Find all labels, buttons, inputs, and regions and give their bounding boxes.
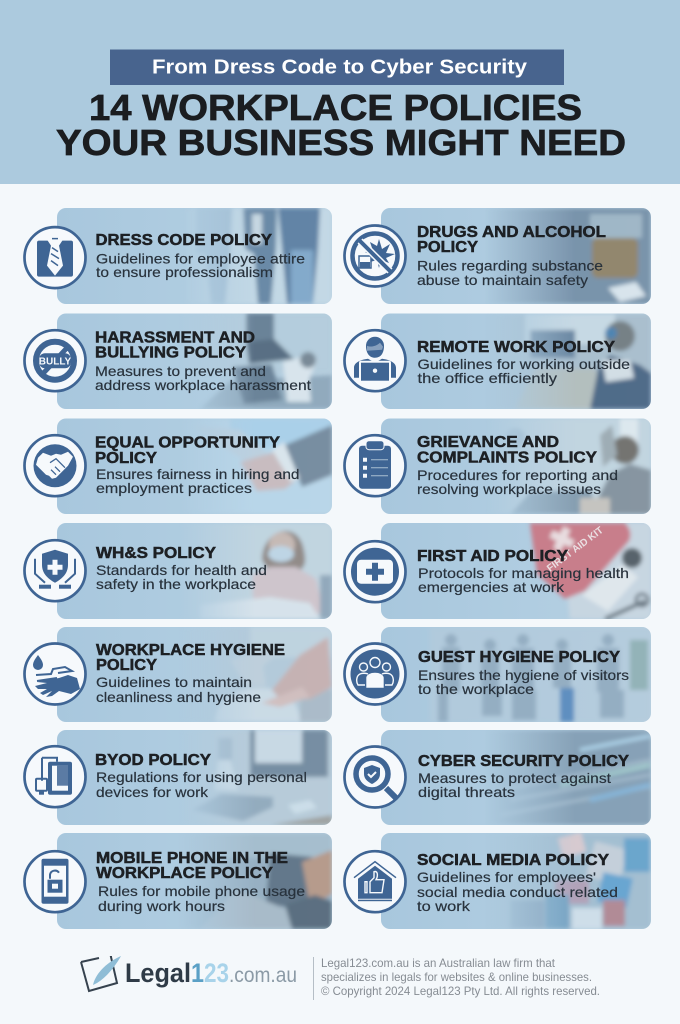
- description: emergencies at work: [418, 579, 565, 595]
- panel: harassment and bullying policy: [24, 313, 332, 409]
- heading: WORKPLACE POLICY: [96, 865, 274, 882]
- photo: man on headset at desk: [516, 314, 651, 409]
- panel: mobile phone policy: [24, 833, 332, 929]
- photo: first aid kit: [530, 523, 651, 619]
- heading: EQUAL OPPORTUNITY: [95, 435, 281, 452]
- description: Procedures for reporting and: [417, 467, 618, 483]
- photo: social media cubes: [510, 833, 651, 929]
- panel: workplace hygiene policy: [24, 627, 332, 722]
- photo: desk with devices: [200, 730, 332, 825]
- description: Measures to prevent and: [95, 363, 266, 379]
- photo: code on screen: [500, 730, 651, 825]
- heading: [417, 224, 606, 256]
- footer text: [321, 957, 600, 998]
- heading: CYBER SECURITY POLICY: [418, 753, 630, 770]
- description: [417, 258, 603, 288]
- footer text: specializes in legals for websites & online businesses.: [321, 971, 592, 984]
- description: [95, 363, 311, 393]
- description: safety in the workplace: [96, 576, 256, 592]
- heading: [95, 330, 255, 362]
- heading: [417, 434, 598, 467]
- footer logo: [81, 956, 297, 991]
- icon: no bullying: BULLY: [39, 357, 72, 368]
- heading: MOBILE PHONE IN THE: [96, 850, 288, 867]
- footer logo: 23: [204, 958, 229, 988]
- icon: first aid case: [344, 541, 406, 602]
- icon: shield and hands: [24, 540, 86, 601]
- description: devices for work: [96, 784, 209, 800]
- description: Guidelines to maintain: [96, 674, 252, 690]
- panel: guest hygiene policy: [344, 627, 651, 722]
- description: Rules regarding substance: [417, 258, 603, 274]
- subtitle banner: From Dress Code to Cyber Security: [152, 56, 528, 78]
- photo: people in a meeting: [514, 418, 651, 514]
- heading: BULLYING POLICY: [95, 345, 247, 362]
- heading: DRUGS AND ALCOHOL: [417, 224, 606, 241]
- description: address workplace harassment: [95, 377, 311, 393]
- description: [418, 667, 629, 697]
- description: Standards for health and: [96, 562, 267, 578]
- icon: group of people: [344, 644, 406, 704]
- heading: GUEST HYGIENE POLICY: [418, 649, 621, 666]
- description: Ensures the hygiene of visitors: [418, 667, 629, 683]
- description: [417, 467, 618, 497]
- heading: FIRST AID POLICY: [417, 548, 569, 565]
- description: Guidelines for employee attire: [96, 250, 305, 266]
- icon: shirt and tie: [24, 227, 86, 288]
- description: Measures to protect against: [418, 770, 611, 786]
- photo: hand sanitiser: [216, 628, 332, 722]
- photo: seated guests: [430, 627, 651, 722]
- footer logo: 1: [191, 958, 204, 988]
- icon: handshake: [24, 435, 86, 496]
- description: cleanliness and hygiene: [96, 689, 261, 705]
- description: to ensure professionalism: [96, 264, 273, 280]
- header band: [0, 0, 680, 184]
- heading: POLICY: [95, 450, 158, 467]
- description: [417, 869, 618, 914]
- description: [418, 565, 629, 595]
- heading: POLICY: [96, 657, 158, 674]
- footer logo: .com.au: [229, 964, 297, 987]
- panel: grievance and complaints policy: [344, 418, 651, 514]
- footer text: Legal123.com.au is an Australian law firm that: [321, 957, 556, 970]
- description: [96, 466, 300, 496]
- panel: equal opportunity policy: [24, 418, 332, 514]
- description: [96, 562, 267, 592]
- heading: DRESS CODE POLICY: [96, 232, 273, 249]
- description: Guidelines for working outside: [418, 356, 630, 372]
- description: to the workplace: [418, 681, 534, 697]
- heading: COMPLAINTS POLICY: [417, 450, 598, 467]
- main title: 14 WORKPLACE POLICIES: [89, 87, 582, 128]
- icon: person with laptop: [344, 330, 406, 391]
- description: Regulations for using personal: [96, 769, 307, 785]
- description: abuse to maintain safety: [417, 272, 588, 288]
- description: Guidelines for employees': [417, 869, 596, 885]
- photo: shoe on worker: [205, 314, 332, 409]
- description: Ensures fairness in hiring and: [96, 466, 300, 482]
- description: Protocols for managing health: [418, 565, 629, 581]
- description: resolving workplace issues: [417, 481, 601, 497]
- photo: phone and laptop: [198, 833, 332, 929]
- icon: devices and cable: [24, 746, 86, 807]
- photo: whisky and pills: [480, 208, 651, 304]
- subtitle banner: [110, 50, 564, 85]
- description: [418, 356, 630, 386]
- icon: phone with lock: [24, 851, 86, 912]
- photo: business people: [216, 208, 330, 304]
- description: during work hours: [98, 898, 225, 914]
- heading: [95, 435, 281, 467]
- heading: [96, 642, 285, 674]
- panel: remote work policy: [344, 314, 651, 409]
- panel: BYOD policy: [24, 730, 332, 825]
- footer text: © Copyright 2024 Legal123 Pty Ltd. All rights reserved.: [321, 985, 600, 998]
- panel: social media policy: [344, 832, 651, 929]
- photo: woman with mask: [200, 524, 332, 619]
- icon: no drugs or alcohol: [344, 226, 406, 286]
- description: [96, 674, 261, 705]
- description: social media conduct related: [417, 884, 618, 900]
- panel: dress code policy: [24, 208, 332, 304]
- description: digital threats: [418, 784, 515, 800]
- description: [96, 250, 305, 280]
- heading: HARASSMENT AND: [95, 330, 255, 347]
- panel: WH&S policy: [24, 523, 332, 619]
- description: employment practices: [96, 480, 252, 496]
- description: Rules for mobile phone usage: [98, 883, 305, 899]
- description: [418, 770, 611, 800]
- kit label: FIRST AID KIT: [545, 525, 606, 574]
- panel: first aid policy: [344, 523, 651, 619]
- description: the office efficiently: [418, 370, 557, 386]
- description: [96, 769, 307, 800]
- icon: clipboard: [344, 435, 406, 496]
- description: [98, 883, 305, 914]
- heading: [96, 850, 288, 882]
- heading: SOCIAL MEDIA POLICY: [417, 852, 610, 869]
- icon: magnifier with shield: [344, 746, 406, 808]
- heading: GRIEVANCE AND: [417, 434, 559, 451]
- main title: [56, 87, 626, 163]
- heading: WORKPLACE HYGIENE: [96, 642, 285, 659]
- footer divider: [313, 957, 314, 1000]
- description: to work: [417, 898, 471, 914]
- photo: handshake: [240, 418, 332, 512]
- panel: cyber security policy: [344, 730, 651, 825]
- heading: POLICY: [417, 239, 479, 256]
- icon: house with thumbs up: [344, 851, 406, 912]
- heading: BYOD POLICY: [95, 752, 212, 769]
- icon: no bullying: [24, 330, 86, 391]
- heading: WH&S POLICY: [96, 545, 217, 562]
- main title: YOUR BUSINESS MIGHT NEED: [56, 122, 626, 163]
- heading: REMOTE WORK POLICY: [417, 339, 616, 356]
- icon: washing hands: [24, 644, 86, 704]
- footer logo: Legal: [125, 958, 191, 988]
- panel: drugs and alcohol policy: [344, 208, 651, 304]
